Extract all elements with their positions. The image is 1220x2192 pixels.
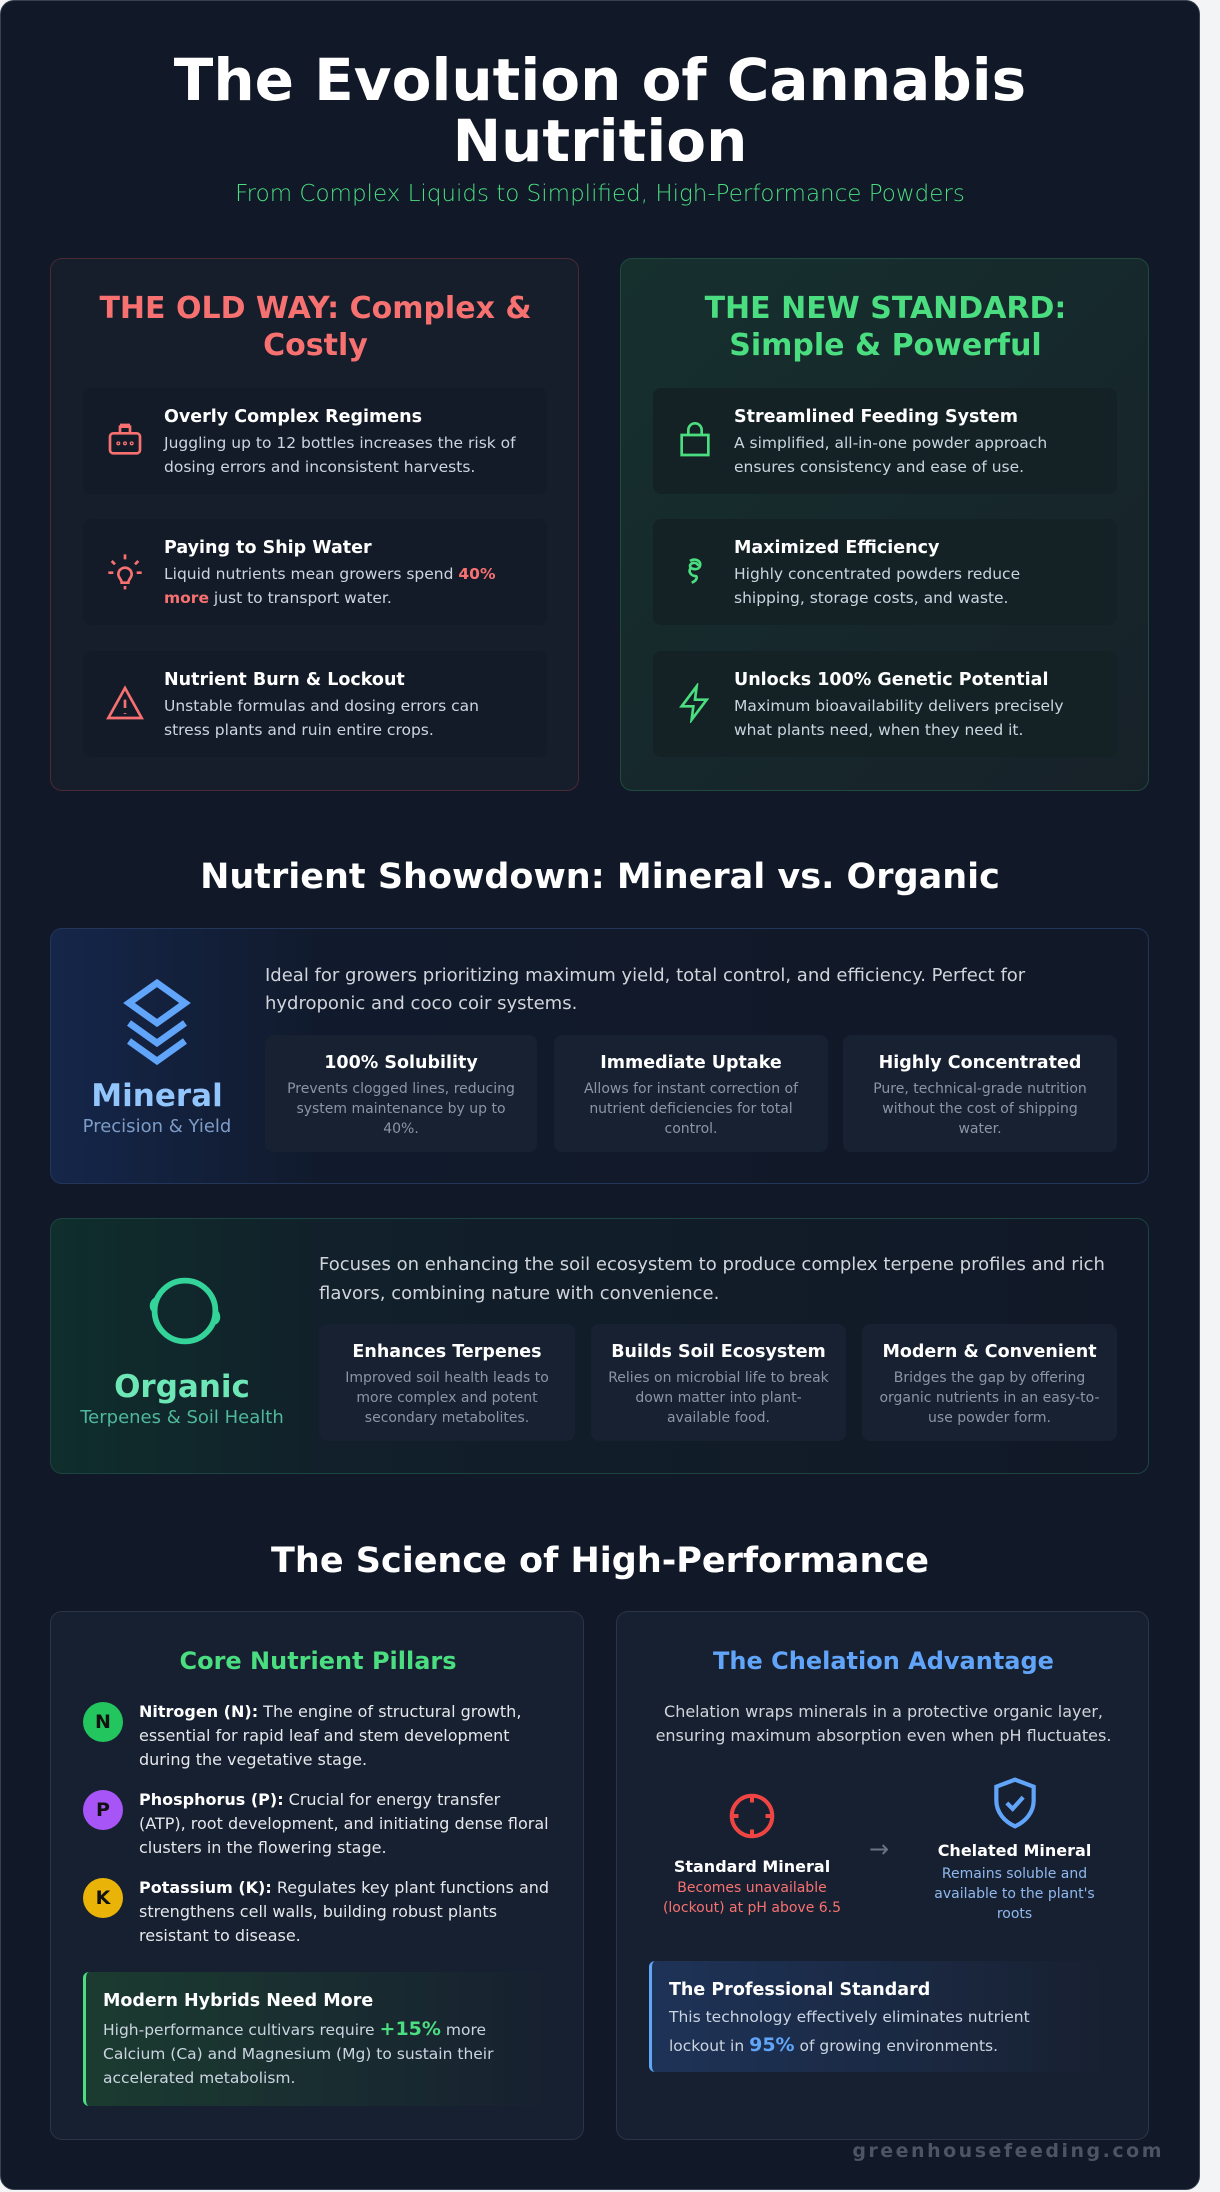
item: chelated mineral: Remains soluble and available to the plant's roots — [934, 1866, 1095, 1922]
item: genetic potential: Maximum bioavailability delivers precisely what plants need, when they need it. — [734, 697, 1064, 739]
card: uptake: Immediate Uptake — [600, 1053, 782, 1073]
item: streamlined — [653, 388, 1117, 494]
item: genetic potential — [653, 651, 1117, 757]
heading: science: The Science of High-Performance — [271, 1541, 929, 1581]
label: mineral — [83, 1078, 231, 1137]
card: soil — [591, 1324, 846, 1441]
item: efficiency: Highly concentrated powders reduce shipping, storage costs, and waste. — [734, 565, 1020, 607]
item: streamlined: A simplified, all-in-one powder approach ensures consistency and ease of use. — [734, 434, 1047, 476]
text: organic intro: Focuses on enhancing the soil ecosystem to produce complex terpene profiles and rich flavors, combining nature with convenience. — [319, 1254, 1105, 1304]
card: concentrated: Highly Concentrated — [879, 1053, 1081, 1073]
item: genetic potential: Unlocks 100% Genetic Potential — [734, 670, 1048, 690]
nutrient: phosphorus — [83, 1790, 549, 1857]
icon: cycle — [150, 1278, 220, 1344]
item: chelated mineral — [934, 1777, 1095, 1922]
card: concentrated: Pure, technical-grade nutrition without the cost of shipping water. — [873, 1081, 1087, 1137]
card: convenient: Bridges the gap by offering organic nutrients in an easy-to-use powder form. — [879, 1370, 1100, 1426]
item: chelated mineral: Chelated Mineral — [938, 1841, 1091, 1860]
heading: new standard: Simple & Powerful — [729, 328, 1042, 363]
card: concentrated — [843, 1035, 1117, 1152]
card: convenient — [862, 1324, 1117, 1441]
icon: warning — [106, 685, 144, 720]
nutrient: phosphorus: Phosphorus (P): Crucial for energy transfer — [139, 1790, 500, 1809]
card: terpenes: Improved soil health leads to more complex and potent secondary metabolites. — [345, 1370, 549, 1426]
heading: chelation: The Chelation Advantage — [713, 1647, 1054, 1675]
card: solubility: Prevents clogged lines, reducing system maintenance by up to 40%. — [287, 1081, 515, 1137]
callout: professional standard — [649, 1961, 1114, 2072]
item: efficiency: Maximized Efficiency — [734, 538, 939, 558]
card: terpenes — [319, 1324, 575, 1441]
card: solubility: 100% Solubility — [324, 1053, 478, 1073]
card: soil: Builds Soil Ecosystem — [611, 1342, 826, 1362]
item: complex regimens: Juggling up to 12 bottles increases the risk of dosing errors and inconsistent harvests. — [164, 434, 516, 476]
callout: professional standard: This technology effectively eliminates nutrient lockout in 95% of growing environments. — [669, 2008, 1030, 2056]
heading: old way: Costly — [263, 328, 368, 363]
panel: chelation — [616, 1611, 1149, 2140]
item: complex regimens — [83, 388, 547, 494]
callout: professional standard: The Professional Standard — [669, 1980, 930, 2000]
label: mineral: Precision & Yield — [83, 1116, 231, 1137]
heading: new standard: THE NEW STANDARD: — [705, 291, 1066, 326]
panel: mineral — [50, 928, 1149, 1184]
title — [174, 46, 1026, 175]
nutrient: potassium: Potassium (K): Regulates key plant functions and strengthens cell walls, building robust plants resistant to disease. — [139, 1878, 549, 1945]
label: organic: Terpenes & Soil Health — [80, 1407, 284, 1428]
heading: pillars: Core Nutrient Pillars — [179, 1647, 457, 1675]
nutrient: nitrogen: N — [95, 1711, 111, 1733]
item: standard mineral — [663, 1794, 841, 1916]
item: nutrient burn: Nutrient Burn & Lockout — [164, 670, 405, 690]
arrow: → — [869, 1835, 889, 1863]
icon: lightning — [679, 683, 710, 723]
icon: bulb — [108, 554, 142, 590]
item: ship water: Liquid nutrients mean growers spend 40% more just to transport water. — [164, 565, 496, 607]
card: terpenes: Enhances Terpenes — [352, 1342, 542, 1362]
heading: new standard — [704, 291, 1066, 363]
item: ship water: Paying to Ship Water — [164, 538, 372, 558]
icon: bag — [680, 422, 710, 456]
icon: crosshair — [730, 1794, 774, 1838]
label: mineral: Mineral — [91, 1078, 223, 1114]
callout: modern hybrids: High-performance cultivars require +15% more Calcium (Ca) and Magnesium (Mg) to sustain their accelerated metabolism. — [103, 2018, 493, 2087]
nutrient: phosphorus: P — [96, 1799, 110, 1821]
text: chelation intro: Chelation wraps minerals in a protective organic layer, ensuring maximum absorption even when pH fluctuates. — [656, 1702, 1111, 1745]
callout: modern hybrids: Modern Hybrids Need More — [103, 1991, 373, 2011]
item: streamlined: Streamlined Feeding System — [734, 407, 1018, 427]
footer: website: greenhousefeeding.com — [852, 2140, 1164, 2162]
panel: old way — [50, 258, 579, 791]
heading: old way — [99, 291, 532, 363]
card: uptake — [554, 1035, 828, 1152]
title: Nutrition — [453, 107, 747, 175]
callout: modern hybrids — [83, 1972, 553, 2106]
panel: organic — [50, 1218, 1149, 1474]
panel: new standard — [620, 258, 1149, 791]
icon: toolbox — [108, 424, 142, 455]
subtitle: From Complex Liquids to Simplified, High-Performance Powders — [235, 181, 965, 207]
panel: core nutrient pillars — [50, 1611, 584, 2140]
item: nutrient burn: Unstable formulas and dosing errors can stress plants and ruin entire crops. — [164, 697, 479, 739]
icon: shield — [994, 1777, 1036, 1829]
card: solubility — [265, 1035, 537, 1152]
nutrient: potassium: K — [96, 1887, 110, 1909]
nutrient: phosphorus: (ATP), root development, and initiating dense floral clusters in the flowering stage. — [139, 1814, 549, 1857]
item: efficiency — [653, 519, 1117, 625]
nutrient: nitrogen: Nitrogen (N): The engine of structural growth, essential for rapid leaf and stem development during the vegetative stage. — [139, 1702, 521, 1769]
label: organic — [80, 1369, 284, 1428]
icon: layers — [123, 979, 191, 1066]
card: soil: Relies on microbial life to break down matter into plant-available food. — [608, 1370, 829, 1426]
title: The Evolution of Cannabis — [174, 46, 1026, 114]
heading: nutrient showdown: Nutrient Showdown: Mineral vs. Organic — [200, 857, 1000, 897]
icon: swirl — [688, 558, 702, 584]
item: nutrient burn — [83, 651, 547, 757]
card: convenient: Modern & Convenient — [882, 1342, 1097, 1362]
item: standard mineral: Standard Mineral — [674, 1857, 830, 1876]
item: standard mineral: Becomes unavailable (lockout) at pH above 6.5 — [663, 1880, 841, 1916]
label: organic: Organic — [114, 1369, 250, 1405]
heading: old way: THE OLD WAY: Complex & — [99, 291, 532, 326]
item: complex regimens: Overly Complex Regimens — [164, 407, 422, 427]
item: ship water — [83, 519, 547, 625]
text: mineral intro: Ideal for growers prioritizing maximum yield, total control, and efficiency. Perfect for hydroponic and coco coir systems. — [265, 965, 1025, 1014]
card: uptake: Allows for instant correction of nutrient deficiencies for total control. — [584, 1081, 798, 1137]
